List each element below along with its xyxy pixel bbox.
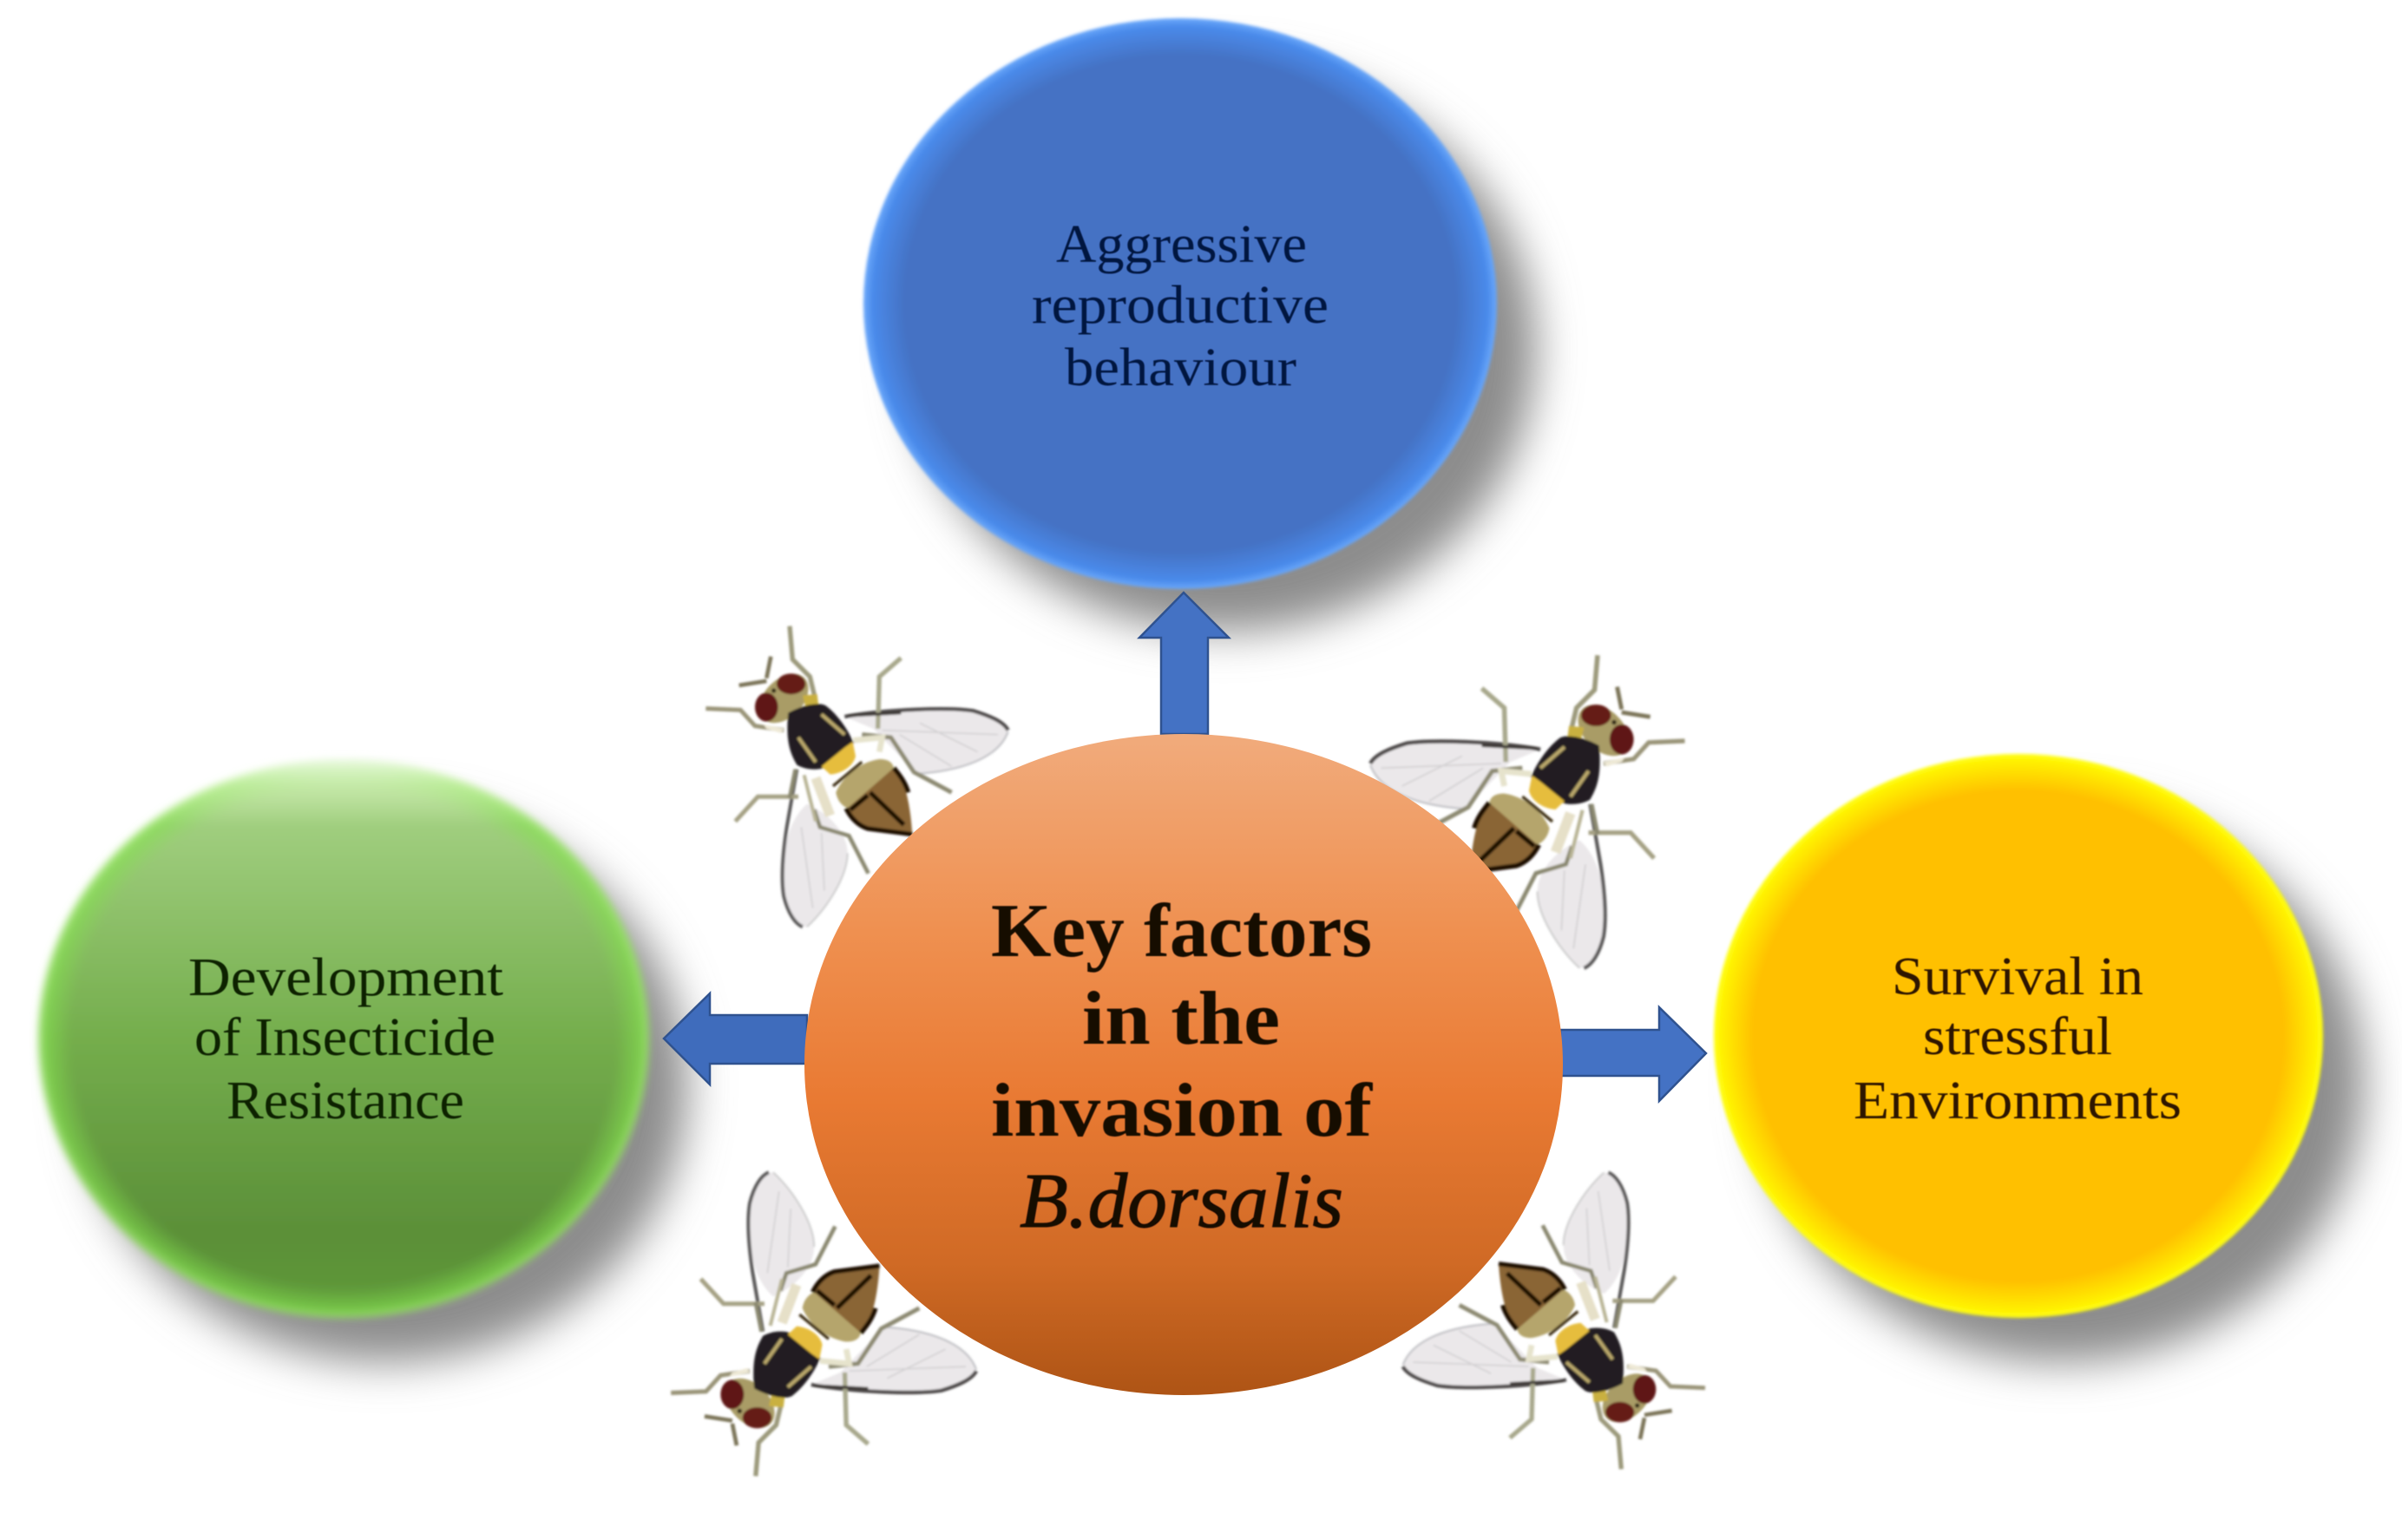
text: development of insecticide resistance: of Insecticide [194, 1008, 495, 1067]
text: development of insecticide resistance [188, 948, 503, 1130]
text: aggressive reproductive behaviour: reproductive [1032, 276, 1329, 335]
title: key factors in the invasion of B.dorsalis [991, 889, 1374, 1244]
text: aggressive reproductive behaviour: behaviour [1065, 338, 1296, 397]
text: survival in stressful environments: stressful [1923, 1007, 2112, 1066]
text: development of insecticide resistance: Resistance [226, 1071, 464, 1130]
text: aggressive reproductive behaviour: Aggressive [1056, 215, 1307, 274]
title: key factors in the invasion of B.dorsalis: B.dorsalis [1020, 1158, 1343, 1244]
panel: key factors centre [804, 734, 1563, 1395]
panel: survival in stressful environments [1714, 754, 2323, 1318]
title: key factors in the invasion of B.dorsalis: invasion of [991, 1069, 1374, 1153]
arrow: left to green circle [664, 993, 807, 1085]
text: aggressive reproductive behaviour [1032, 215, 1329, 397]
arrow: right to yellow circle [1560, 1007, 1706, 1101]
panel: development of insecticide resistance [38, 759, 649, 1318]
icon: fly top left [706, 626, 1008, 927]
blue circle [863, 18, 1497, 589]
text: survival in stressful environments [1854, 947, 2182, 1130]
text: survival in stressful environments: Environments [1854, 1071, 2182, 1130]
arrow: up to blue circle [1139, 593, 1229, 734]
icon: fly bottom left [671, 1172, 976, 1476]
panel: aggressive reproductive behaviour [863, 18, 1497, 589]
green circle [38, 759, 649, 1318]
icon: fly top right [1370, 655, 1685, 968]
text: survival in stressful environments: Survival in [1892, 947, 2143, 1006]
title: key factors in the invasion of B.dorsalis: Key factors [991, 889, 1372, 973]
text: development of insecticide resistance: Development [188, 948, 503, 1007]
title: key factors in the invasion of B.dorsalis: in the [1082, 977, 1280, 1061]
yellow circle [1714, 754, 2323, 1318]
orange circle [804, 734, 1563, 1395]
icon: fly bottom right [1403, 1172, 1705, 1469]
